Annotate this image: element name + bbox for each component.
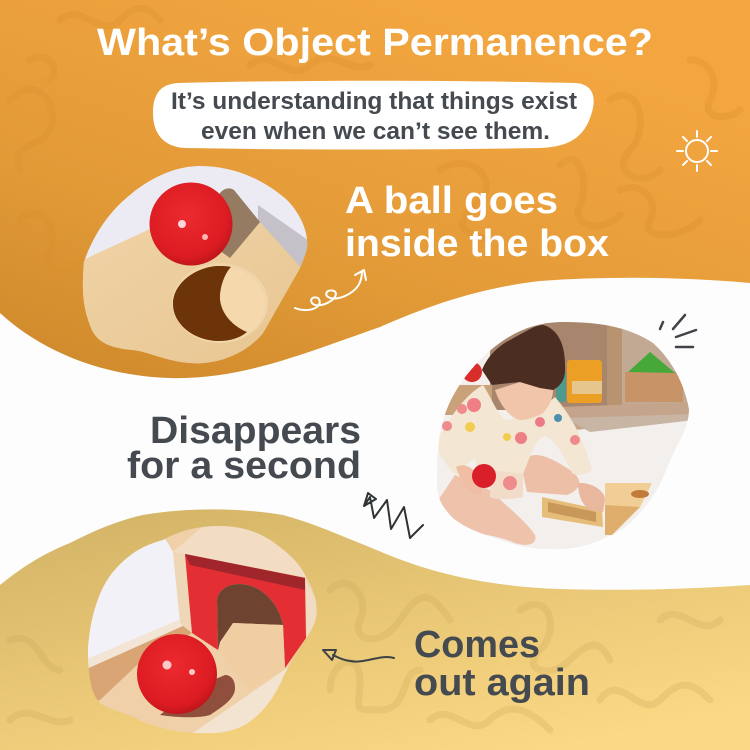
heading: a ball goes (345, 180, 609, 265)
subtitle pill: It’s understanding that things exist (171, 88, 577, 115)
yellow squiggle pattern (10, 583, 720, 730)
icon: sun (677, 131, 717, 171)
title: What’s Object Permanence? (97, 22, 653, 64)
arrow: pointing left (323, 650, 394, 662)
panel: orange top band (0, 0, 750, 378)
arrow: loopy white (295, 270, 366, 310)
photo: baby playing (437, 322, 689, 550)
photo: ball on box (82, 166, 308, 364)
subtitle pill: even when we can’t see them. (201, 118, 550, 145)
icon: burst lines (660, 315, 696, 347)
icon: red ball 1 (150, 182, 232, 266)
heading: comes out again (414, 624, 590, 704)
heading: disappears: Disappears (150, 410, 361, 452)
heading: disappears: for a second (127, 445, 361, 487)
heading: disappears (127, 410, 361, 487)
orange squiggle pattern (10, 8, 740, 271)
heading: a ball goes: A ball goes (345, 180, 558, 222)
arrow: zigzag (364, 493, 423, 538)
heading: comes out again: out again (414, 662, 590, 704)
heading: a ball goes: inside the box (345, 223, 609, 265)
photo: ball out of the box (88, 526, 317, 734)
panel: yellow bottom band (0, 509, 750, 750)
subtitle pill (153, 81, 594, 150)
icon: red ball 2 (137, 634, 217, 714)
heading: comes out again: Comes (414, 624, 540, 666)
